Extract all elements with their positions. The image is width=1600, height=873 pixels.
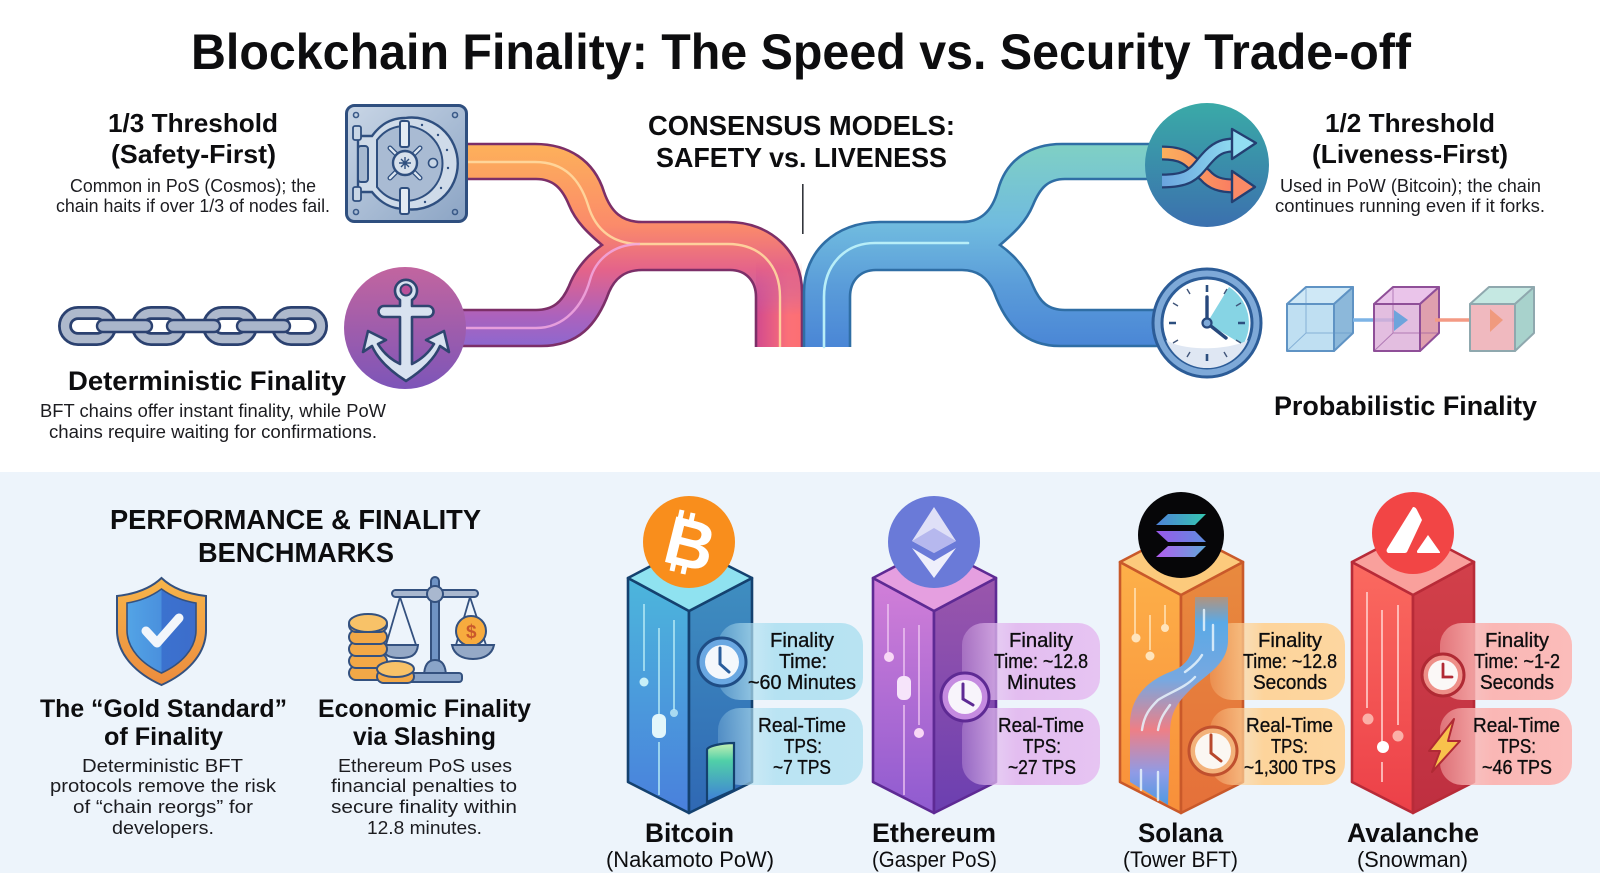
bitcoin logo: B	[657, 502, 723, 587]
avalanche finality pill	[1440, 623, 1572, 700]
bitcoin label	[606, 818, 774, 872]
block: 1/3 threshold text: Common in PoS (Cosmos); the	[70, 176, 316, 196]
block: economic finality text: financial penalties to	[331, 776, 517, 796]
label: probabilistic finality: Probabilistic Finality	[1274, 391, 1537, 421]
tower: Ethereum	[872, 496, 1100, 872]
ethereum TPS pill	[962, 708, 1100, 785]
avalanche finality pill: Seconds	[1480, 672, 1554, 694]
block: gold standard text: protocols remove the risk	[50, 776, 277, 796]
block: economic finality text: via Slashing	[353, 723, 496, 751]
ethereum clock icon	[941, 673, 989, 721]
bitcoin finality pill: ~60 Minutes	[748, 672, 856, 694]
solana TPS pill: Real-Time	[1246, 715, 1333, 737]
solana TPS pill: ~1,300 TPS	[1244, 757, 1336, 779]
block: 1/3 threshold text: chain haits if over 1/3 of nodes fail.	[56, 196, 330, 216]
tower: Bitcoin	[606, 496, 863, 872]
block: gold standard text: developers.	[112, 818, 214, 838]
icon: shuffle arrows	[1145, 103, 1269, 227]
solana finality pill	[1210, 623, 1345, 700]
block: 1/3 threshold text: (Safety-First)	[111, 139, 276, 169]
block: gold standard text: The “Gold Standard”	[40, 695, 287, 723]
icon: wall clock	[1153, 269, 1261, 377]
heading: consensus models: CONSENSUS MODELS:	[648, 110, 955, 141]
ethereum finality pill	[962, 623, 1100, 700]
solana label	[1123, 818, 1238, 872]
bitcoin TPS pill: Real-Time	[758, 715, 846, 737]
block: deterministic finality text: Deterministic Finality	[68, 366, 346, 396]
avalanche clock icon	[1422, 654, 1464, 696]
block: economic finality text: Ethereum PoS uses	[338, 756, 512, 776]
block: 1/2 threshold text: 1/2 Threshold	[1325, 108, 1495, 138]
ethereum TPS pill: Real-Time	[998, 715, 1084, 737]
ethereum finality pill: Finality	[1009, 630, 1073, 652]
heading: performance benchmarks: BENCHMARKS	[198, 537, 394, 568]
solana label: (Tower BFT)	[1123, 847, 1238, 872]
heading: consensus models: SAFETY vs. LIVENESS	[656, 142, 947, 173]
block: 1/2 threshold text: continues running even if it forks.	[1275, 196, 1545, 216]
icon: shield	[117, 578, 206, 685]
ethereum finality pill: Minutes	[1007, 672, 1076, 694]
tower: Solana	[1120, 492, 1345, 872]
solana clock icon	[1189, 727, 1237, 775]
solana logo	[1138, 492, 1224, 578]
ethereum finality pill: Time: ~12.8	[994, 651, 1088, 673]
bitcoin TPS pill: ~7 TPS	[773, 757, 831, 779]
bitcoin clock icon	[698, 638, 746, 686]
avalanche TPS pill: Real-Time	[1473, 715, 1560, 737]
icon: scale and coins	[349, 577, 494, 683]
avalanche TPS pill: ~46 TPS	[1482, 757, 1552, 779]
ethereum label	[872, 818, 997, 872]
solana label: Solana	[1138, 818, 1224, 848]
background: lower section band	[0, 472, 1600, 873]
solana TPS pill	[1210, 708, 1345, 785]
solana finality pill: Finality	[1258, 630, 1322, 652]
block: deterministic finality text	[40, 366, 386, 442]
avalanche finality pill: Time: ~1-2	[1474, 651, 1560, 673]
center divider line	[802, 184, 804, 234]
bitcoin label: Bitcoin	[645, 818, 734, 848]
block: gold standard text	[40, 695, 287, 838]
icon: anchor	[344, 267, 466, 389]
avalanche TPS pill	[1440, 708, 1572, 785]
solana data stream	[1130, 597, 1228, 805]
block: 1/2 threshold text: (Liveness-First)	[1312, 139, 1508, 169]
ethereum TPS pill: ~27 TPS	[1008, 757, 1076, 779]
block: 1/3 threshold text: 1/3 Threshold	[108, 108, 278, 138]
heading: performance benchmarks: PERFORMANCE & FINALITY	[110, 504, 481, 535]
block: economic finality text: secure finality within	[331, 797, 517, 817]
ethereum TPS pill: TPS:	[1023, 736, 1061, 758]
solana finality pill: Time: ~12.8	[1243, 651, 1337, 673]
avalanche label	[1347, 818, 1479, 872]
bitcoin TPS pill	[707, 708, 863, 802]
block: economic finality text: Economic Finality	[318, 695, 531, 723]
block: 1/3 threshold text	[56, 108, 330, 216]
avalanche logo	[1372, 492, 1454, 574]
bitcoin finality pill: Time:	[779, 651, 827, 673]
right liveness pipe	[804, 144, 1170, 347]
icon: scale and coins: $	[466, 622, 477, 643]
ethereum logo	[888, 496, 980, 588]
left safety pipe	[460, 144, 802, 347]
block: gold standard text: of “chain reorgs” for	[73, 797, 253, 817]
block: economic finality text	[318, 695, 531, 838]
avalanche label: (Snowman)	[1357, 847, 1468, 872]
block: economic finality text: 12.8 minutes.	[367, 818, 482, 838]
bitcoin logo	[643, 496, 735, 588]
heading: performance benchmarks	[110, 504, 481, 568]
ethereum label: Ethereum	[872, 818, 996, 848]
icon: vault	[346, 106, 466, 222]
block: 1/2 threshold text	[1275, 108, 1545, 216]
solana finality pill: Seconds	[1253, 672, 1327, 694]
tower: Avalanche	[1347, 492, 1572, 872]
bitcoin finality pill: Finality	[770, 630, 834, 652]
block: deterministic finality text: chains require waiting for confirmations.	[49, 422, 377, 442]
solana TPS pill: TPS:	[1271, 736, 1308, 758]
block: gold standard text: of Finality	[104, 723, 223, 751]
block: deterministic finality text: BFT chains offer instant finality, while PoW	[40, 401, 386, 421]
heading: consensus models	[648, 110, 955, 173]
block: gold standard text: Deterministic BFT	[82, 756, 243, 776]
avalanche TPS pill: TPS:	[1498, 736, 1536, 758]
icon: chain	[65, 313, 321, 339]
avalanche label: Avalanche	[1347, 818, 1479, 848]
ethereum label: (Gasper PoS)	[872, 847, 997, 872]
bitcoin finality pill	[718, 623, 863, 700]
title: Blockchain Finality: The Speed vs. Security Trade-off	[191, 24, 1411, 80]
bitcoin label: (Nakamoto PoW)	[606, 847, 774, 872]
avalanche finality pill: Finality	[1485, 630, 1549, 652]
bitcoin TPS pill: TPS:	[784, 736, 822, 758]
block: 1/2 threshold text: Used in PoW (Bitcoin); the chain	[1280, 176, 1541, 196]
avalanche lightning icon	[1429, 719, 1460, 772]
icon: linked blocks	[1287, 287, 1534, 351]
